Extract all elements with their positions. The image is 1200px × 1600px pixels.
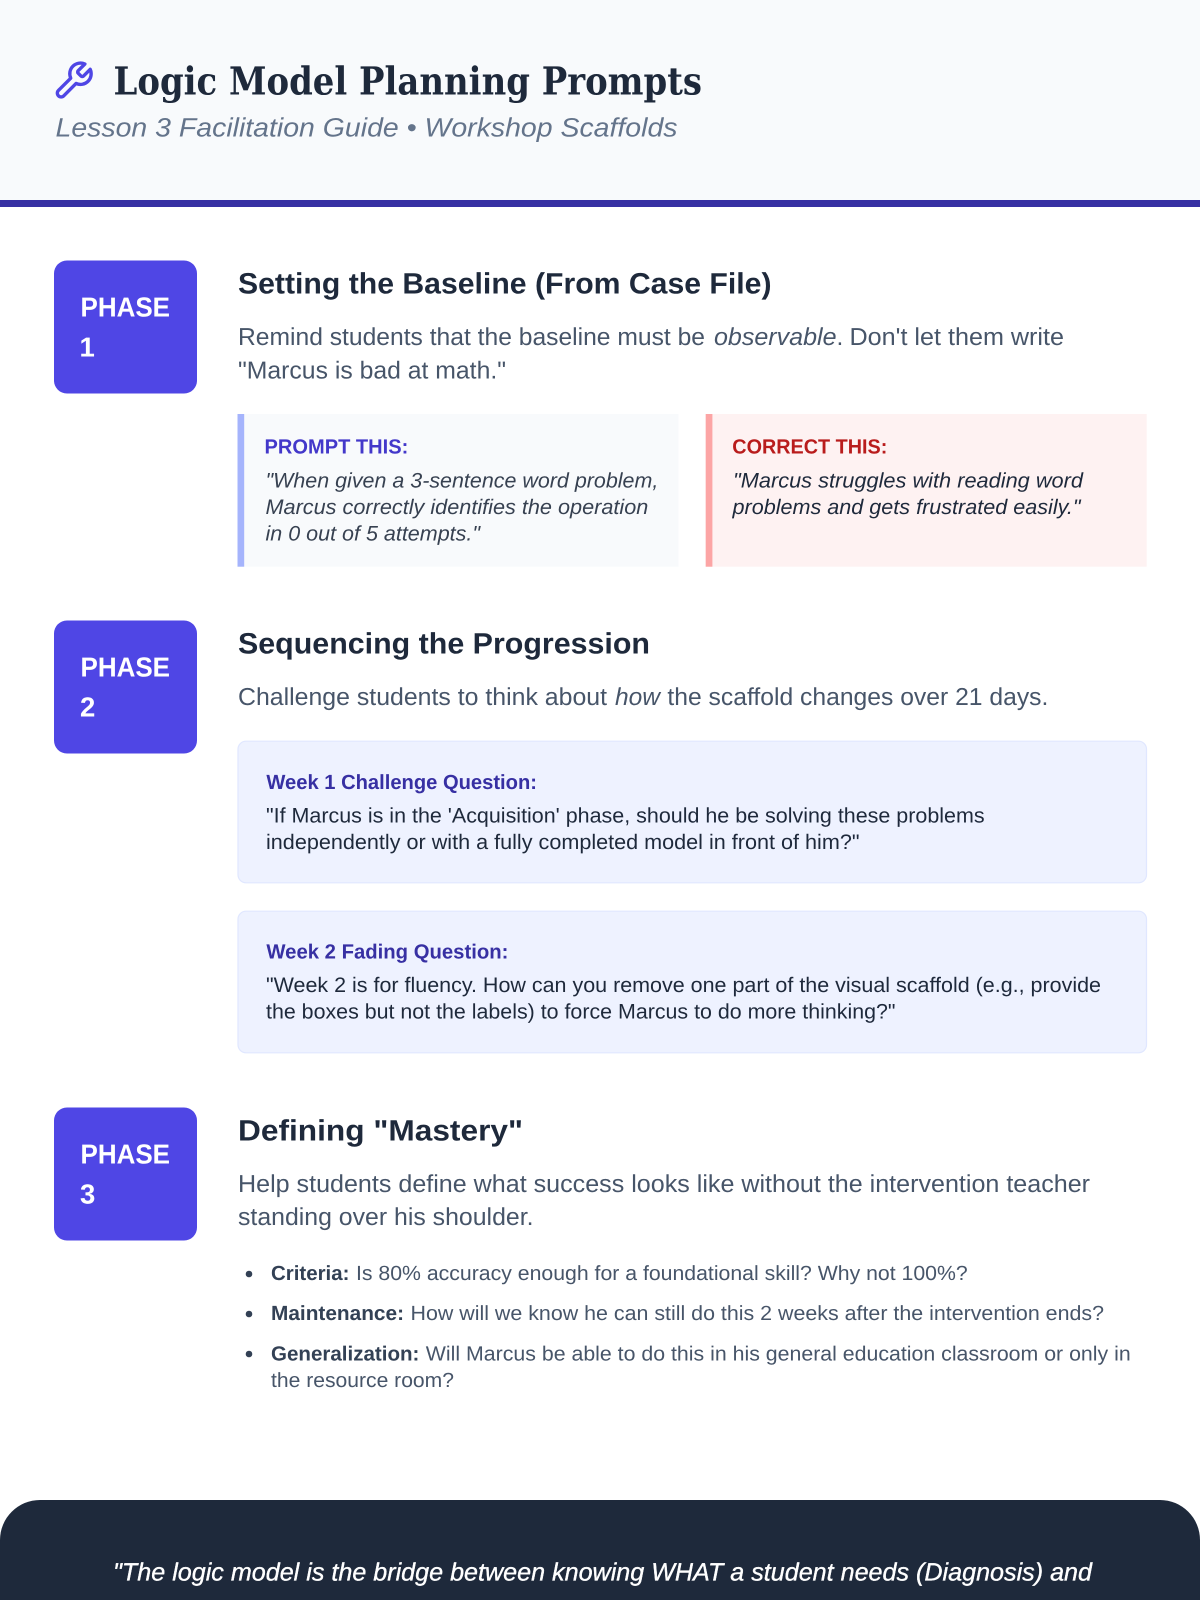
header (0, 0, 1200, 207)
card: week 2 fading question: the boxes but not the labels) to force Marcus to do more thinking?" (266, 1000, 896, 1024)
text block: phase 1 description: "Marcus is bad at math." (238, 358, 506, 384)
text block: phase 3 description (238, 1171, 1090, 1231)
text block: phase 3 description: Help students define what success looks like without the intervention teacher (238, 1171, 1090, 1198)
footer quote (0, 1500, 1200, 1600)
callout: prompt this: in 0 out of 5 attempts." (266, 523, 482, 546)
badge: phase 2: 2 (80, 692, 95, 722)
text block: phase 3 description: standing over his shoulder. (238, 1204, 534, 1231)
footer quote: "The logic model is the bridge between knowing WHAT a student needs (Diagnosis) and (113, 1558, 1093, 1586)
badge: phase 3: PHASE (80, 1139, 170, 1170)
card: week 1 challenge question: "If Marcus is in the 'Acquisition' phase, should he be solving these problems (266, 804, 985, 827)
badge: phase 1 (54, 260, 197, 394)
list item: criteria: Criteria: (271, 1262, 349, 1285)
card: week 2 fading question: "Week 2 is for fluency. How can you remove one part of the visual scaffold (e.g., provide (266, 974, 1101, 997)
card: week 1 challenge question (238, 741, 1146, 883)
text block: phase 2 description: Challenge students to think about (238, 684, 607, 711)
text block: phase 2 description (238, 684, 1048, 711)
card: week 1 challenge question: independently or with a fully completed model in front of him?" (266, 831, 860, 854)
callout: prompt this: Marcus correctly identifies the operation (266, 496, 648, 519)
badge: phase 2: PHASE (80, 652, 170, 683)
callout: prompt this (238, 414, 678, 567)
panel: phase 3 (54, 1108, 1131, 1392)
list item: generalization (246, 1342, 1131, 1392)
list item: criteria: Is 80% accuracy enough for a foundational skill? Why not 100%? (356, 1262, 968, 1285)
text block: phase 1 description (238, 324, 1064, 384)
text block: phase 1 description: Remind students that the baseline must be (238, 324, 705, 351)
card: week 2 fading question: Week 2 Fading Question: (266, 940, 508, 964)
card: week 1 challenge question: Week 1 Challenge Question: (266, 771, 537, 794)
callout: correct this: "Marcus struggles with reading word (733, 469, 1084, 492)
heading: defining mastery: Defining "Mastery" (238, 1114, 523, 1147)
badge: phase 2 (54, 620, 197, 754)
text block: phase 1 description: Don't let them write (850, 324, 1064, 351)
title: Logic Model Planning Prompts (114, 60, 702, 104)
list item: maintenance: How will we know he can still do this 2 weeks after the intervention ends? (410, 1302, 1104, 1325)
panel: phase 1 (54, 260, 1147, 567)
text block: phase 2 description: the scaffold changes over 21 days. (667, 684, 1048, 711)
text block: phase 2 description: how (615, 684, 662, 711)
callout: correct this (706, 414, 1147, 567)
badge: phase 1: PHASE (80, 292, 170, 323)
text block: phase 1 description: . (836, 324, 843, 351)
badge: phase 3 (54, 1108, 197, 1240)
heading: setting the baseline: Setting the Baseline (From Case File) (238, 268, 772, 300)
list item: maintenance: Maintenance: (271, 1302, 404, 1325)
list item: generalization: the resource room? (271, 1369, 454, 1392)
callout: prompt this: "When given a 3-sentence word problem, (266, 469, 658, 492)
badge: phase 3: 3 (80, 1178, 95, 1210)
callout: prompt this: PROMPT THIS: (264, 435, 408, 458)
subtitle: Lesson 3 Facilitation Guide • Workshop Scaffolds (56, 113, 678, 143)
icon: wrench (57, 63, 91, 97)
text block: phase 1 description: observable (714, 324, 836, 351)
list item: generalization: Will Marcus be able to do this in his general education classroom or only in (426, 1342, 1131, 1366)
panel: phase 2 (54, 620, 1146, 1053)
callout: correct this: CORRECT THIS: (732, 435, 887, 458)
list item: generalization: Generalization: (271, 1342, 419, 1366)
card: week 2 fading question (238, 911, 1146, 1053)
callout: correct this: problems and gets frustrated easily." (731, 496, 1082, 519)
heading: sequencing the progression: Sequencing the Progression (238, 628, 650, 660)
badge: phase 1: 1 (80, 332, 95, 362)
list: mastery criteria (246, 1262, 1131, 1392)
